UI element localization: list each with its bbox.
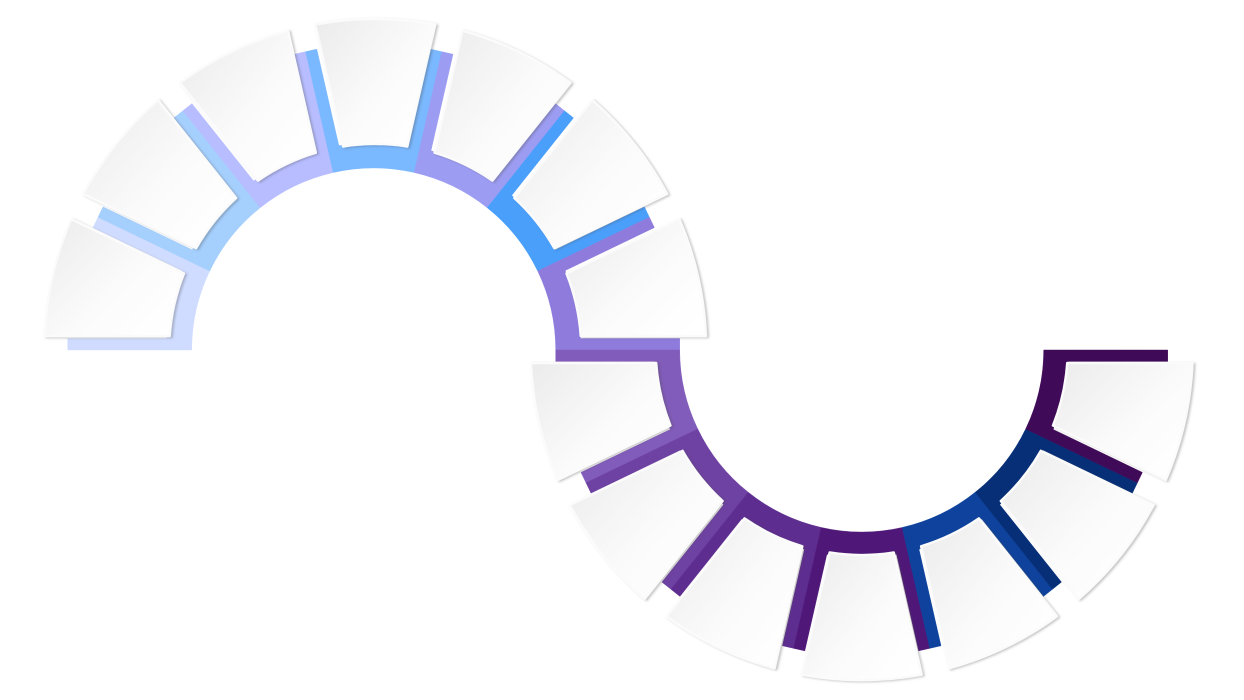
segment 5 ring (389, 49, 566, 220)
card 8 (531, 363, 670, 480)
card 5 (435, 31, 570, 181)
top arc cards (44, 19, 706, 336)
segment 2 ring (96, 109, 277, 293)
card 6 (514, 100, 667, 248)
segment 7 ring (532, 217, 682, 377)
segment 13 ring (958, 407, 1139, 591)
segment 1 ring (65, 217, 216, 377)
segment 14 ring (1020, 323, 1170, 483)
card 11 (802, 552, 922, 680)
card 9 (570, 451, 723, 599)
segment 12 ring (877, 480, 1054, 651)
card 13 (1001, 451, 1154, 599)
card 2 (83, 100, 236, 248)
card 12 (921, 518, 1057, 668)
top arc: coloured ring with spokes (65, 49, 682, 377)
segment 11 ring (794, 527, 930, 651)
segment 3 ring (182, 49, 358, 220)
card 7 (566, 219, 706, 336)
card 1 (44, 219, 184, 336)
segment 4 ring (306, 49, 442, 173)
bottom arc: coloured ring with spokes (553, 323, 1170, 651)
segment 6 ring (470, 109, 651, 293)
segment 9 ring (584, 407, 765, 591)
bottom arc cards (531, 363, 1192, 680)
segment 8 ring (553, 323, 704, 483)
card 10 (666, 518, 802, 668)
card 4 (315, 19, 435, 147)
segment 10 ring (670, 480, 846, 651)
card 3 (180, 31, 316, 181)
card 14 (1053, 363, 1192, 480)
